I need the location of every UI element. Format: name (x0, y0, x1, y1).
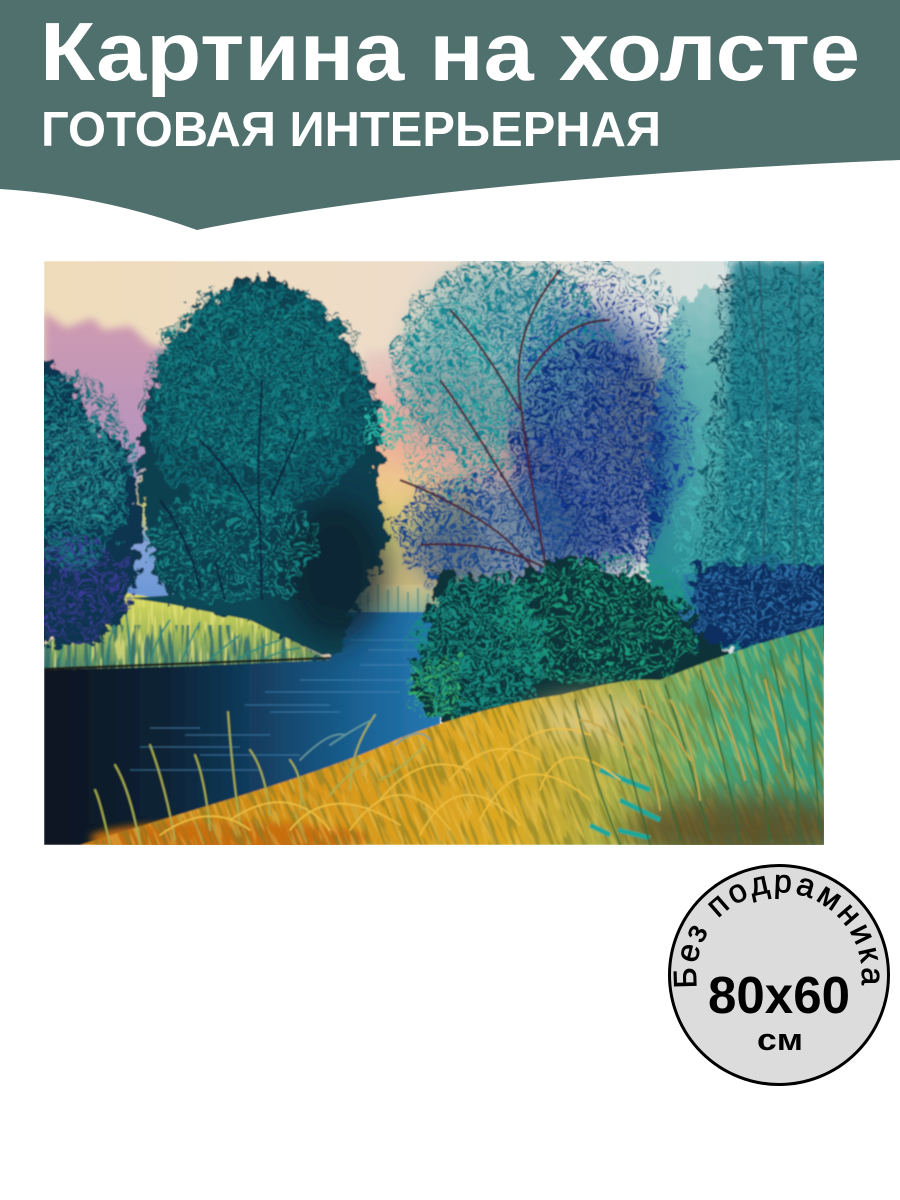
header banner (0, 0, 900, 230)
badge arc label: Без подрамника (674, 874, 880, 986)
title: Картина на холсте (40, 5, 860, 98)
subtitle: ГОТОВАЯ ИНТЕРЬЕРНАЯ (41, 103, 661, 157)
sky (44, 261, 824, 661)
left edge tree (44, 358, 146, 652)
right bare-branched tree (392, 257, 692, 640)
size badge (668, 864, 890, 1086)
river water (44, 612, 440, 845)
misty far trees (640, 261, 824, 654)
riverside shrubs (412, 557, 860, 745)
foreground grass blades (95, 640, 820, 845)
left grassy bank (44, 592, 332, 671)
landscape painting (44, 261, 824, 845)
badge size: 80x60 (708, 967, 850, 1025)
badge unit: см (757, 1022, 803, 1057)
foreground meadow grass (80, 624, 824, 845)
centre round tree (130, 278, 407, 655)
far reeds (340, 584, 440, 613)
